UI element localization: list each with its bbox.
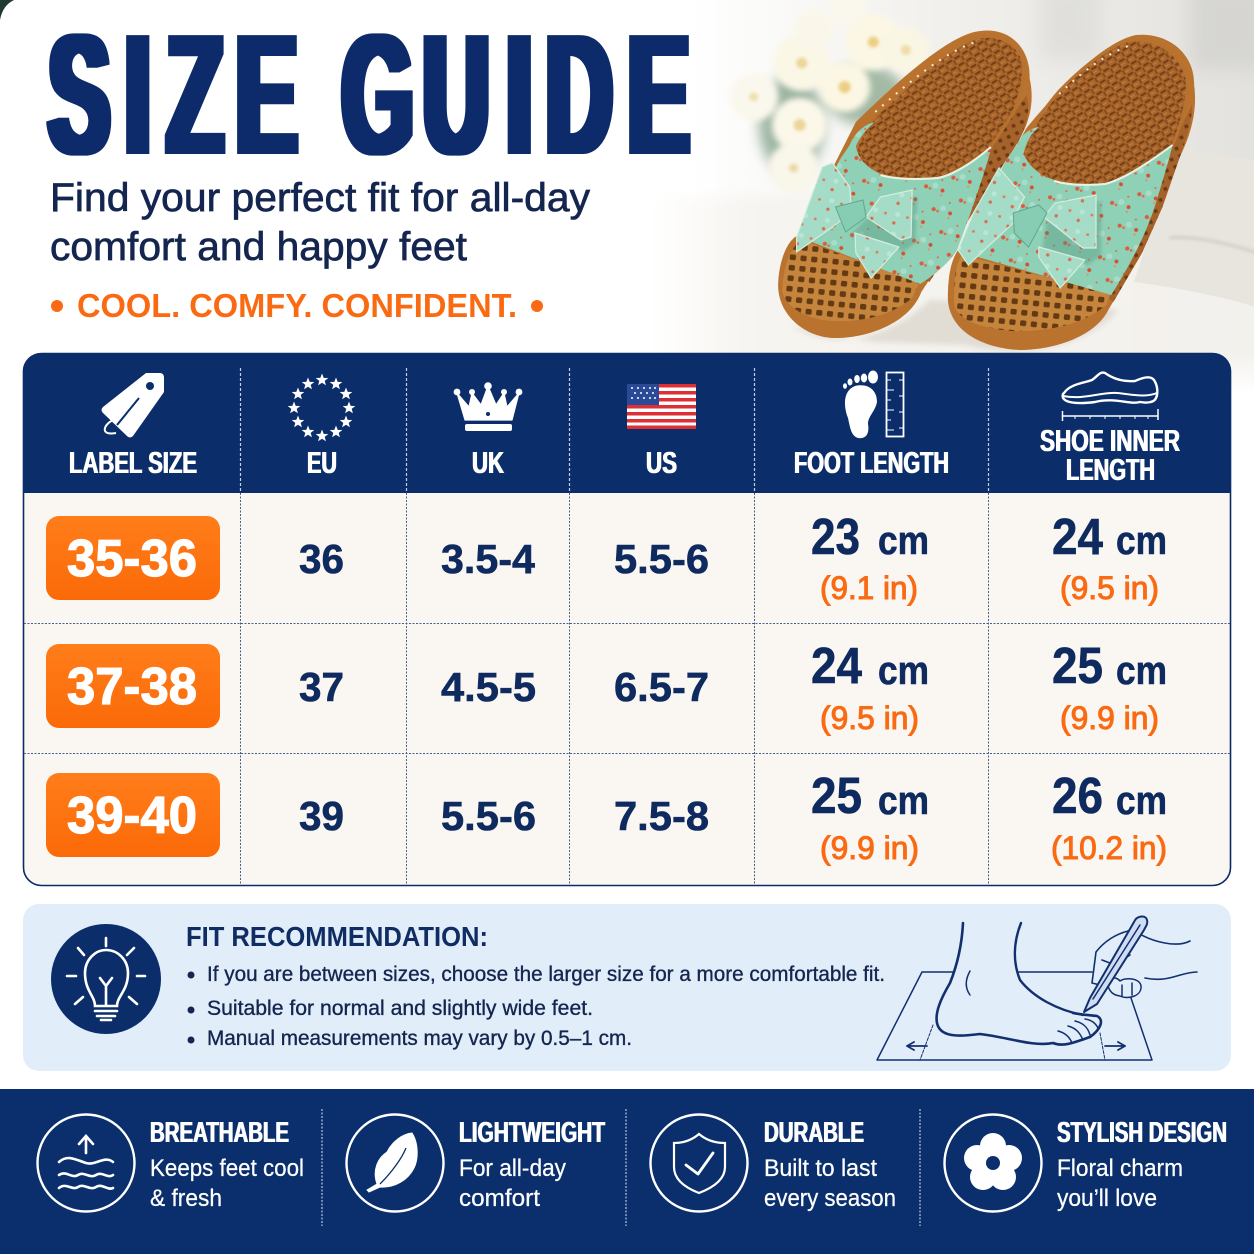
row: 37-38: (9.9 in) [1060,700,1159,736]
feature: breathable: Keeps feet cool [150,1155,304,1182]
feature: stylish design [944,1114,1227,1212]
feature: durable: Built to last [764,1155,877,1182]
panel: fit recommendation [23,904,1231,1071]
row: 37-38: cm [1116,649,1167,693]
feature: durable [650,1114,896,1212]
panel: features footer [0,1089,1254,1254]
fit bullet list [188,963,885,1050]
fit bullet list: Suitable for normal and slightly wide feet. [207,997,593,1020]
icon: light bulb [51,924,161,1034]
feature: durable: every season [764,1185,896,1212]
column head: shoe inner length: SHOE INNER [1040,423,1180,458]
column head: EU: EU [307,445,337,480]
row: 39-40: cm [878,779,929,823]
row: 37-38: 37-38 [67,658,197,716]
subtitle: Find your perfect fit for all-day [50,176,590,220]
row: 39-40: (9.9 in) [820,830,919,866]
icon: shoe with ruler [1062,373,1158,421]
row: 35-36: 5.5-6 [614,536,709,582]
row: 39-40: 5.5-6 [441,793,536,839]
feature: lightweight: comfort [459,1185,540,1212]
row: 39-40: 39-40 [67,787,197,845]
feature: durable: DURABLE [764,1117,864,1149]
column head: UK: UK [472,445,504,480]
subtitle [50,176,590,269]
illustration: tracing foot on paper [877,916,1197,1060]
feature: stylish design: you’ll love [1057,1185,1157,1212]
row: 37-38: 6.5-7 [614,664,709,710]
row: 35-36: cm [878,519,929,563]
photo: slippers on white surface with flowers [0,0,1254,393]
feature: breathable [38,1114,304,1212]
feature: lightweight [346,1114,605,1212]
title: SIZE GUIDE [49,0,689,189]
icon: price tag [102,373,164,438]
icon: crown [454,382,522,431]
column head: US: US [646,445,677,480]
subtitle: comfort and happy feet [50,225,467,269]
fit bullet list: Manual measurements may vary by 0.5–1 cm. [207,1027,632,1050]
towels [1134,146,1254,312]
column head: shoe inner length: LENGTH [1066,452,1155,487]
right slipper [948,35,1195,350]
row: 37-38: (9.5 in) [820,700,919,736]
row: 39-40: (10.2 in) [1051,830,1167,866]
row: 39-40: 7.5-8 [614,793,709,839]
row: 37-38: 4.5-5 [441,664,536,710]
row: 39-40: cm [1116,779,1167,823]
row: 39-40: 39 [299,793,344,839]
column head: label size: LABEL SIZE [69,445,197,480]
row: 35-36: 35-36 [67,530,197,588]
row: 35-36: cm [1116,519,1167,563]
panel: size table [23,353,1231,886]
row: 35-36: 23 [811,508,860,565]
row: 37-38 [46,637,1167,736]
row: 39-40: 25 [811,767,862,824]
tagline: COOL. COMFY. CONFIDENT. [77,287,517,324]
row: 35-36: (9.1 in) [820,570,918,606]
feature: lightweight: For all-day [459,1155,566,1182]
fit bullet list: If you are between sizes, choose the larger size for a more comfortable fit. [207,963,885,986]
row: 37-38: cm [878,649,929,693]
column head: shoe inner length [1040,423,1180,487]
row: 35-36: 36 [299,536,344,582]
row: 35-36: (9.5 in) [1060,570,1159,606]
feature: stylish design: Floral charm [1057,1155,1183,1182]
feature: lightweight: LIGHTWEIGHT [459,1117,605,1149]
row: 39-40: 26 [1052,767,1103,824]
icon: foot and ruler [843,370,904,438]
column head: foot length: FOOT LENGTH [794,445,949,480]
row: 35-36: 3.5-4 [441,536,535,582]
row: 35-36: 24 [1052,508,1104,565]
heading: fit recommendation: FIT RECOMMENDATION: [186,921,488,952]
row: 39-40 [46,767,1167,866]
row: 37-38: 24 [811,637,863,694]
row: 37-38: 25 [1052,637,1103,694]
row: 37-38: 37 [299,664,344,710]
icon: US flag [627,384,696,429]
page corner [0,0,14,20]
feature: breathable: BREATHABLE [150,1117,289,1149]
row: 35-36 [46,508,1167,606]
feature: breathable: & fresh [150,1185,222,1212]
left slipper [778,31,1032,338]
icon: EU stars [288,374,355,441]
